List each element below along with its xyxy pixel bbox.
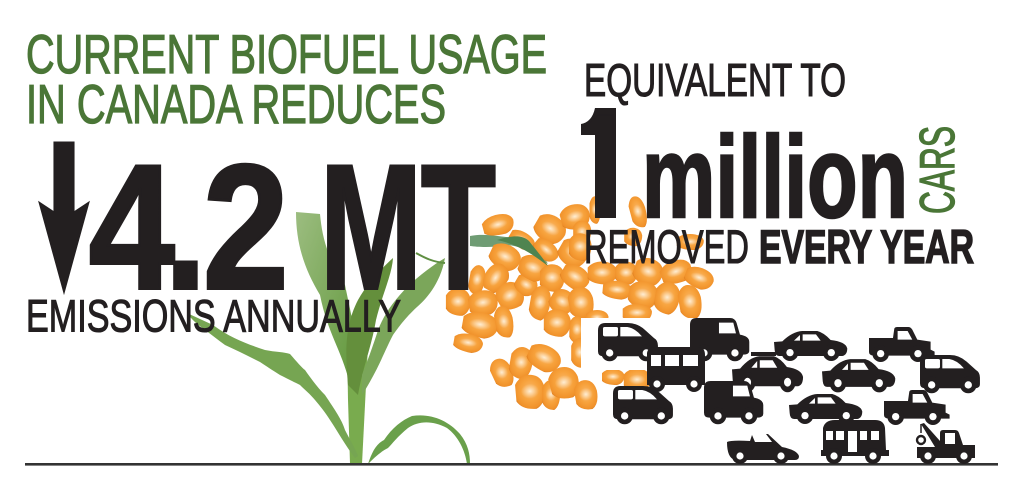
- truck 1: [690, 318, 749, 361]
- corn plant: [187, 212, 548, 464]
- minibus 1: [647, 347, 705, 392]
- right leaf: [362, 258, 445, 395]
- big number: 1: 1: [572, 82, 634, 250]
- plant stalk: [347, 330, 368, 464]
- ground line: [25, 463, 998, 466]
- convertible: [727, 434, 799, 464]
- title: IN CANADA REDUCES: [26, 73, 446, 135]
- big number: 4.2 MT: MT: [320, 129, 496, 327]
- sedan middle: [822, 359, 895, 392]
- tow truck: [917, 423, 975, 464]
- removed every year: REMOVED: [584, 220, 749, 273]
- big number: 4.2 MT: [89, 128, 496, 327]
- van 2: [920, 355, 980, 393]
- lower left leaf: [187, 313, 358, 458]
- truck 2: [704, 381, 763, 424]
- fleet of cars: [598, 318, 980, 464]
- icon: down arrow: [39, 142, 89, 293]
- million: million: [642, 112, 908, 242]
- far right leaf tip over kernels: [497, 236, 548, 266]
- white patch behind cars: [581, 318, 700, 370]
- removed every year: [584, 220, 974, 273]
- far right leaf over kernels: [470, 235, 548, 264]
- title: [26, 23, 547, 135]
- curling lower leaf: [368, 415, 470, 464]
- equivalent to: EQUIVALENT TO: [584, 54, 846, 106]
- inner leaf: [346, 258, 393, 395]
- tall central leaf: [296, 212, 360, 385]
- van 1: [598, 323, 658, 361]
- leaf tendril: [416, 253, 445, 263]
- bus: [821, 420, 889, 464]
- cars vertical label: CARS: [911, 126, 965, 214]
- corn kernels: [446, 194, 717, 412]
- sedan lower: [789, 394, 862, 424]
- sedan top: [774, 331, 847, 361]
- wagon: [732, 352, 803, 392]
- emissions annually: EMISSIONS ANNUALLY: [26, 290, 401, 342]
- van 3: [613, 386, 673, 424]
- big number: 1: [581, 108, 616, 218]
- big number: 4.2 MT: 4.2: [89, 128, 289, 327]
- title: CURRENT BIOFUEL USAGE: [26, 23, 547, 85]
- pickup lower: [884, 390, 950, 425]
- pickup top: [869, 327, 935, 362]
